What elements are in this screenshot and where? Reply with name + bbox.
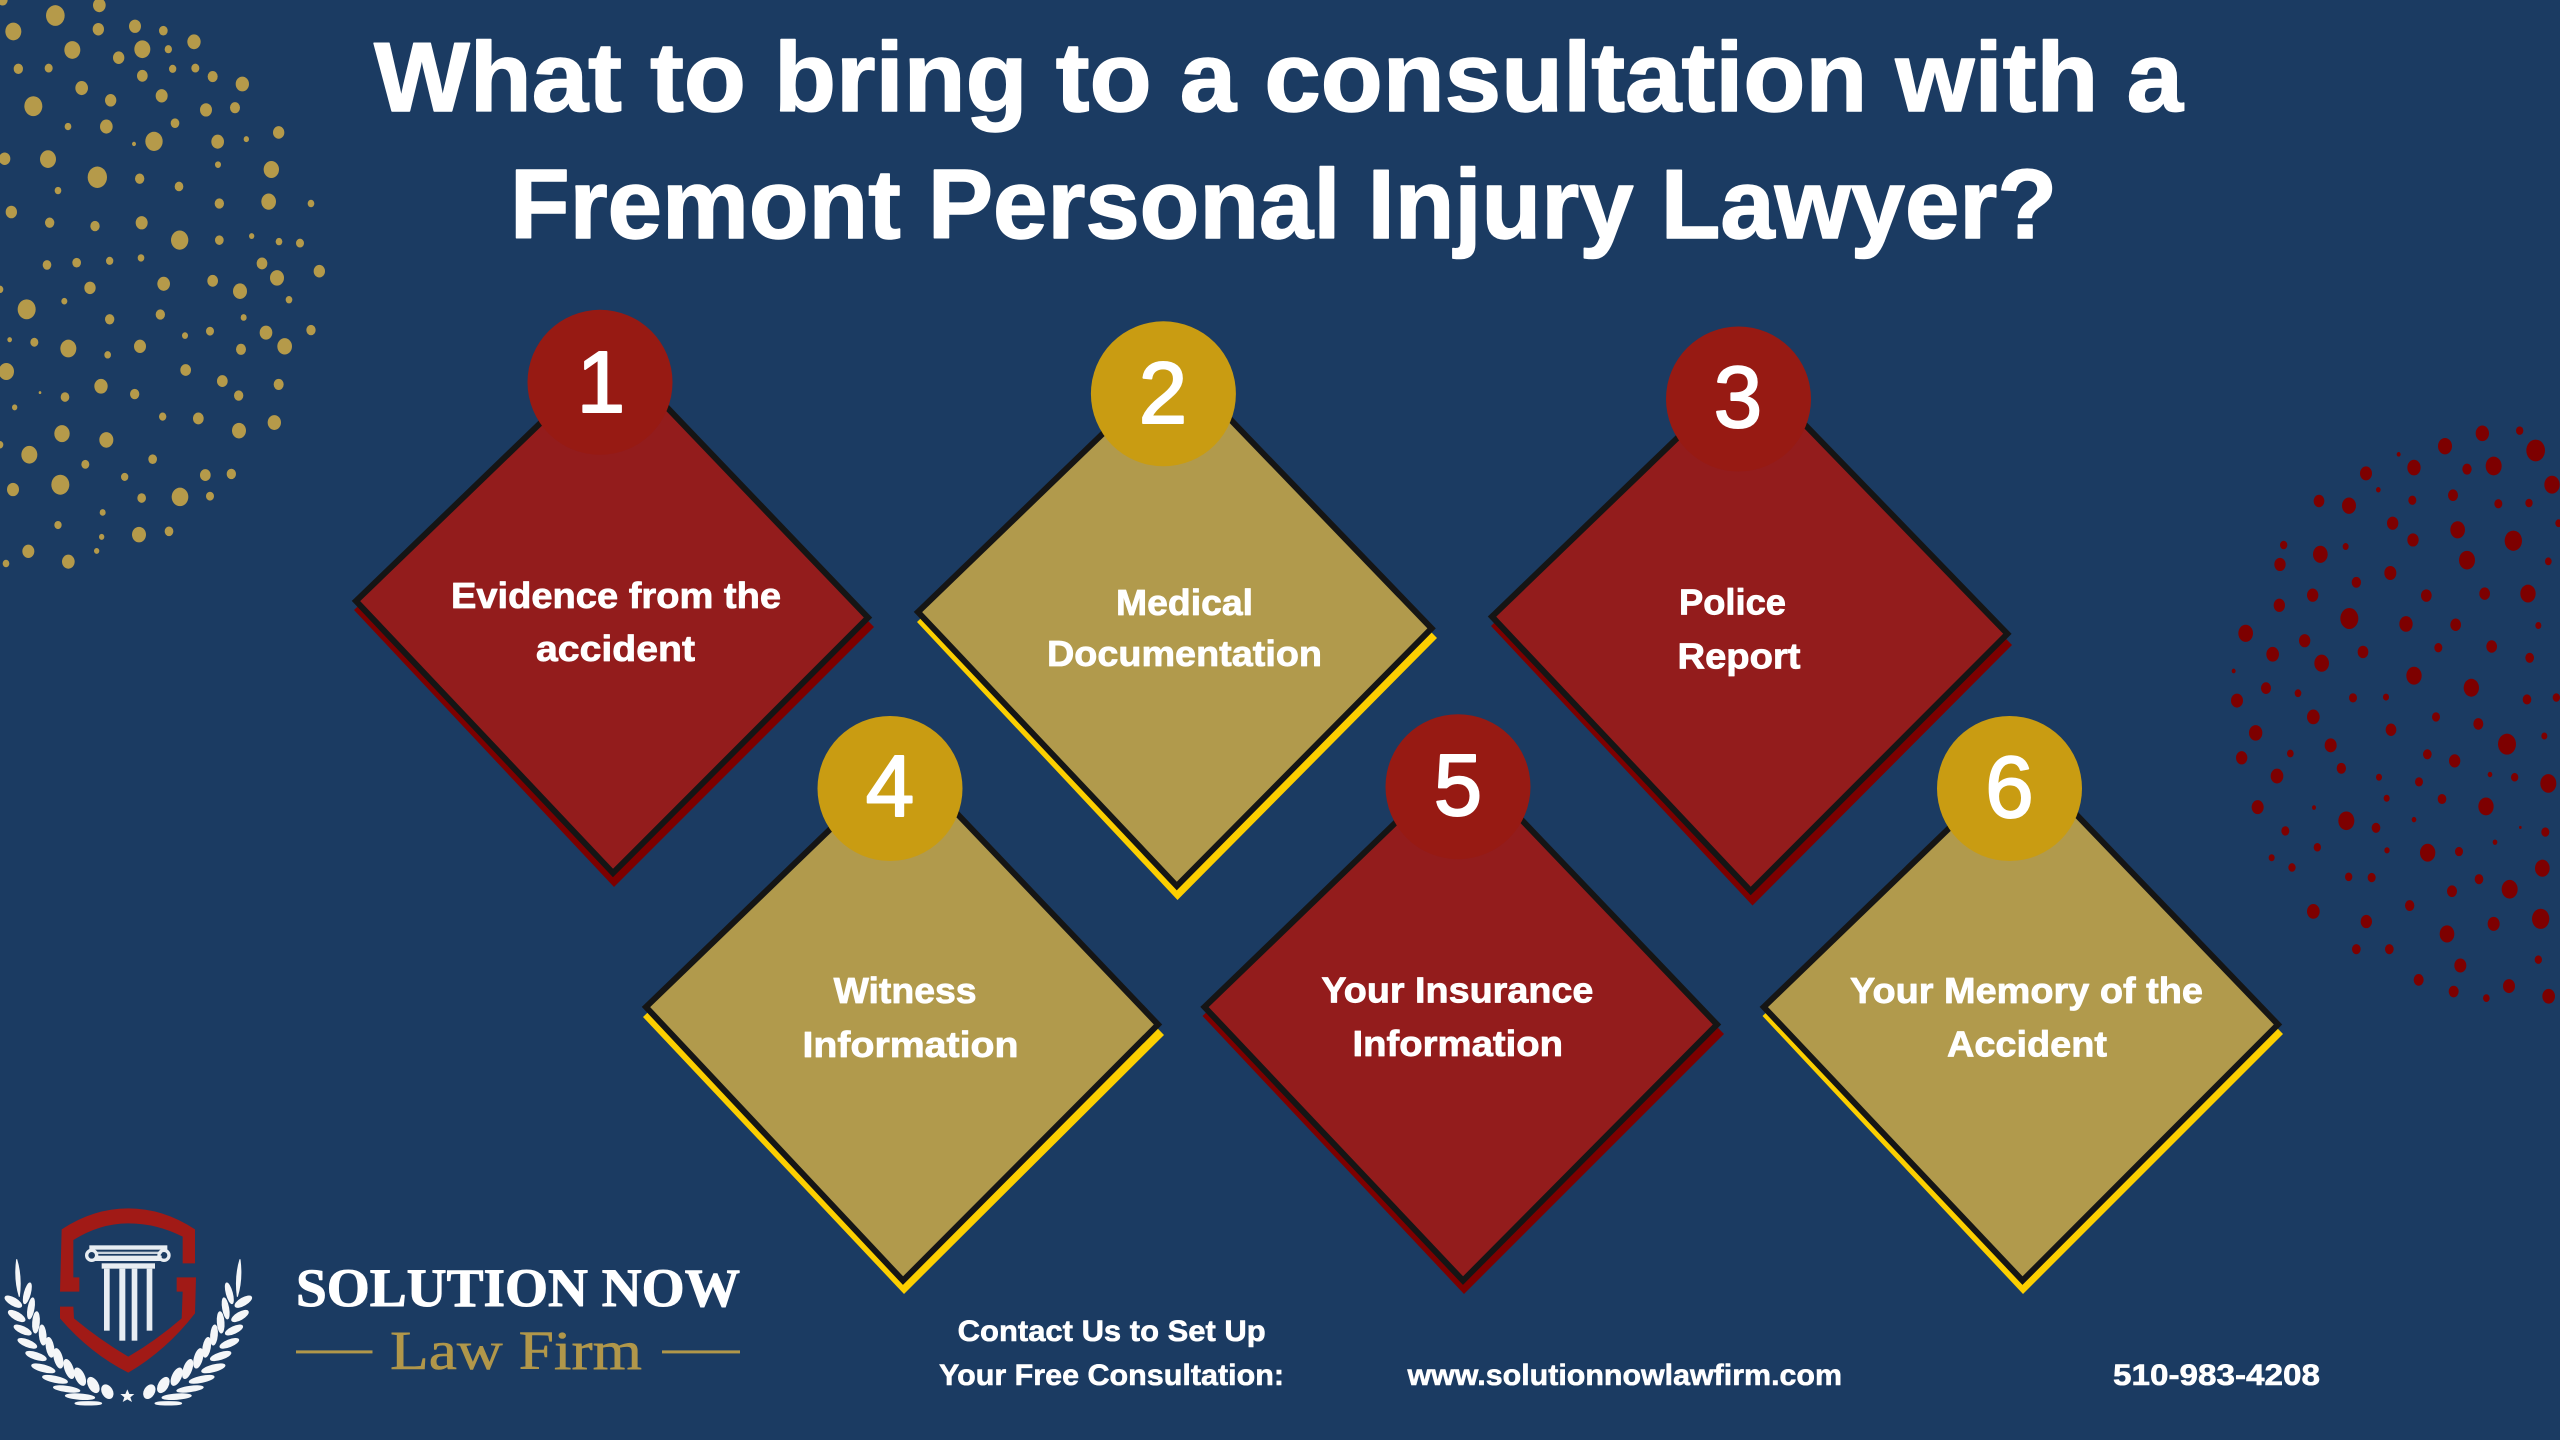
- logo wordmark: SOLUTION NOW: [296, 1258, 740, 1318]
- number 3: 3: [1714, 349, 1762, 446]
- panel: item 6 memory: [1762, 716, 2283, 1294]
- decorative red dots right: [2231, 426, 2560, 1004]
- contact call to action: Your Free Consultation:: [939, 1359, 1284, 1392]
- number 1: 1: [577, 334, 625, 431]
- label 3: Report: [1678, 636, 1801, 676]
- label 6: Accident: [1947, 1024, 2107, 1065]
- diamond shadow 4: [643, 766, 1164, 1294]
- diamond shadow 3: [1491, 376, 2012, 906]
- diamond 4: [646, 758, 1158, 1281]
- number 5: 5: [1434, 737, 1482, 834]
- label 2: Documentation: [1047, 633, 1322, 674]
- label 4: [802, 970, 1018, 1065]
- label 1: accident: [536, 628, 695, 669]
- diamond 1: [356, 352, 868, 873]
- panel: item 5 insurance: [1202, 714, 1724, 1294]
- label 4: Witness: [834, 970, 977, 1011]
- number 4: 4: [866, 738, 914, 835]
- diamond 5: [1204, 758, 1717, 1281]
- diamond 3: [1492, 368, 2007, 891]
- label 6: Your Memory of the: [1850, 970, 2203, 1011]
- number badge 3: [1666, 326, 1811, 472]
- number badge 4: [818, 716, 962, 861]
- contact call to action: Contact Us to Set Up: [958, 1315, 1266, 1348]
- diamond shadow 6: [1762, 766, 2283, 1294]
- icon: law firm shield and laurel logo: [3, 1208, 253, 1405]
- label 5: Information: [1352, 1023, 1563, 1064]
- diamond shadow 1: [354, 360, 874, 887]
- shield upper: [60, 1208, 195, 1292]
- laurel left: [3, 1259, 115, 1405]
- contact call to action: [939, 1315, 1284, 1392]
- shield lower: [60, 1277, 196, 1373]
- phone number: 510-983-4208: [2113, 1359, 2320, 1392]
- label 2: Medical: [1116, 582, 1253, 623]
- column: [87, 1245, 169, 1341]
- label 5: [1321, 970, 1593, 1064]
- title: What to bring to a consultation with a: [374, 22, 2185, 132]
- label 3: [1678, 582, 1801, 676]
- title: [374, 22, 2185, 259]
- decorative gold dots top-left: [0, 0, 325, 569]
- logo wordmark: Law Firm: [390, 1320, 642, 1381]
- label 6: [1850, 970, 2203, 1065]
- number badge 6: [1937, 716, 2082, 861]
- label 1: [451, 575, 781, 669]
- diamond shadow 2: [917, 372, 1437, 900]
- logo wordmark: [296, 1258, 740, 1381]
- diamond 2: [918, 363, 1432, 886]
- star: [120, 1389, 134, 1402]
- number badge 2: [1091, 321, 1236, 466]
- number badge 5: [1386, 714, 1530, 859]
- diamond shadow 5: [1202, 766, 1724, 1294]
- label 2: [1047, 582, 1322, 674]
- diamond 6: [1764, 758, 2278, 1281]
- label 5: Your Insurance: [1321, 970, 1593, 1010]
- number 6: 6: [1985, 739, 2034, 836]
- laurel right: [141, 1259, 253, 1405]
- label 4: Information: [802, 1024, 1018, 1065]
- title: Fremont Personal Injury Lawyer?: [510, 149, 2057, 259]
- number badge 1: [528, 310, 672, 455]
- number 2: 2: [1139, 345, 1187, 442]
- website: www.solutionnowlawfirm.com: [1406, 1359, 1842, 1392]
- panel: item 1 evidence: [354, 310, 874, 887]
- panel: item 2 medical: [917, 321, 1437, 900]
- panel: item 3 police: [1491, 326, 2012, 906]
- panel: item 4 witness: [643, 716, 1164, 1294]
- label 3: Police: [1679, 582, 1786, 622]
- label 1: Evidence from the: [451, 575, 781, 616]
